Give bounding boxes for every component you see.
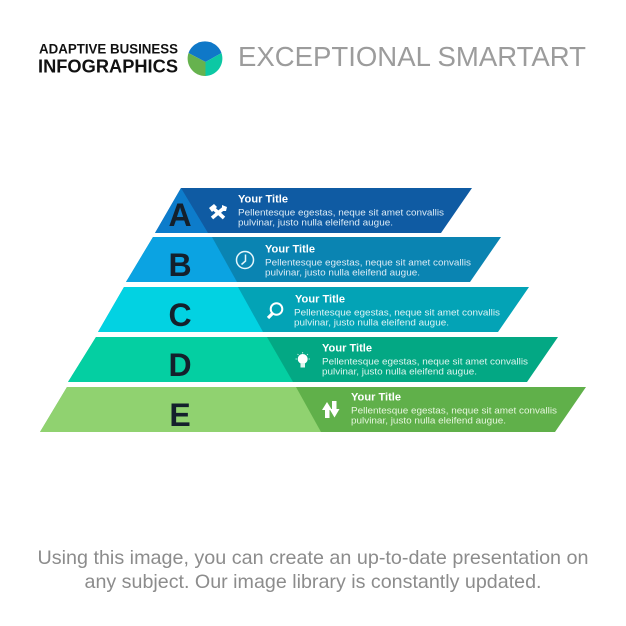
logo wordmark: INFOGRAPHICS	[38, 56, 178, 76]
text A	[238, 194, 444, 228]
text D: pulvinar, justo nulla eleifend augue.	[322, 366, 477, 376]
text E: pulvinar, justo nulla eleifend augue.	[351, 414, 506, 426]
text B: Pellentesque egestas, neque sit amet convallis	[265, 256, 471, 268]
icon: logo circle	[188, 41, 222, 76]
letter B: B	[168, 247, 192, 283]
footer text	[38, 547, 588, 593]
letter C: C	[168, 297, 192, 333]
footer text: any subject. Our image library is constantly updated.	[84, 571, 542, 593]
icon: arrows	[322, 401, 340, 418]
letter A: A	[168, 197, 192, 233]
text B: pulvinar, justo nulla eleifend augue.	[265, 266, 420, 278]
text C: Pellentesque egestas, neque sit amet convallis	[294, 306, 500, 318]
title: EXCEPTIONAL SMARTART	[238, 41, 586, 72]
icon: bulb	[296, 352, 310, 368]
band B	[126, 237, 501, 283]
letter D: D	[168, 347, 192, 383]
footer text: Using this image, you can create an up-to-date presentation on	[38, 547, 588, 569]
text D: Pellentesque egestas, neque sit amet convallis	[322, 356, 528, 366]
text E: Pellentesque egestas, neque sit amet convallis	[351, 404, 557, 416]
text B	[265, 244, 471, 278]
text A: pulvinar, justo nulla eleifend augue.	[238, 216, 393, 228]
text D	[322, 342, 528, 376]
logo wordmark: ADAPTIVE BUSINESS	[39, 42, 178, 56]
text A: Your Title	[238, 194, 288, 206]
band C	[98, 287, 529, 333]
text E	[351, 392, 557, 426]
text E: Your Title	[351, 392, 401, 404]
text C: Your Title	[295, 294, 345, 306]
band D	[68, 337, 558, 383]
letter E: E	[169, 397, 191, 433]
pyramid chart	[40, 188, 586, 433]
text B: Your Title	[265, 244, 315, 256]
band E	[40, 387, 586, 433]
logo wordmark	[38, 42, 178, 76]
band A	[155, 188, 472, 233]
text C: pulvinar, justo nulla eleifend augue.	[294, 316, 449, 328]
icon: tools	[209, 204, 227, 218]
icon: magnifier	[268, 303, 282, 318]
text A: Pellentesque egestas, neque sit amet convallis	[238, 206, 444, 218]
text C	[294, 294, 500, 328]
icon: clock	[236, 252, 254, 268]
text D: Your Title	[322, 342, 372, 354]
